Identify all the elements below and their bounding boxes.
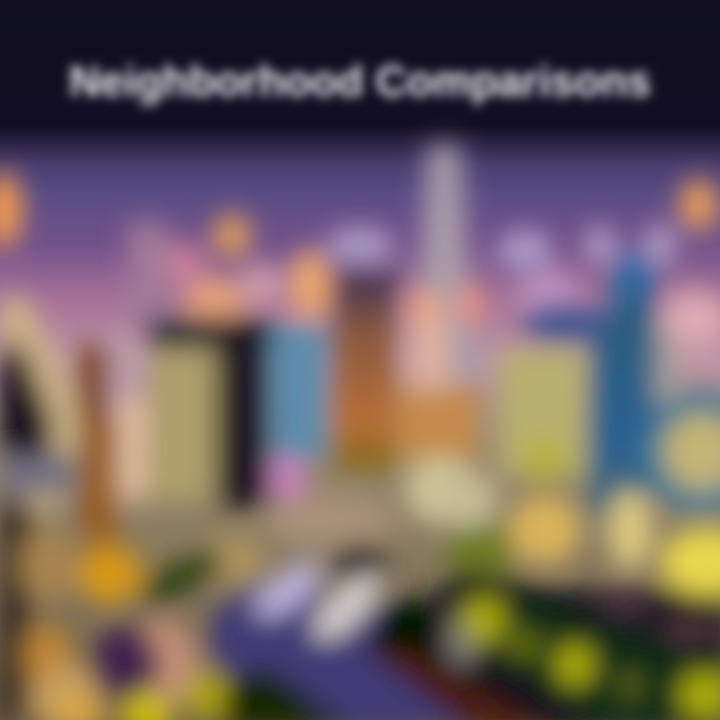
spire tower [409,145,484,380]
dark roof band [148,318,272,348]
dark tower [216,318,268,508]
bottom left trees [54,668,350,720]
pale building [410,320,450,390]
skyline scene [0,145,720,720]
pink tower [110,335,138,475]
vehicle light streaks [246,552,390,650]
yellow building [150,350,216,500]
bright plaza [660,528,720,596]
distant lights [0,172,720,350]
park and dark band [365,570,720,720]
road [205,585,470,720]
ring structure [652,402,720,502]
brown tower [78,345,110,525]
orange tower [332,268,396,473]
light blue tower [272,325,326,460]
lower mid district [196,438,652,585]
title: Neighborhood Comparisons [69,57,651,106]
orange building [398,385,478,460]
left low district [0,400,225,720]
yellow park lights [462,596,720,719]
left arched building [0,295,95,510]
yellow green building [500,350,585,475]
blue tower [521,250,658,525]
right tall pale column [655,330,675,400]
